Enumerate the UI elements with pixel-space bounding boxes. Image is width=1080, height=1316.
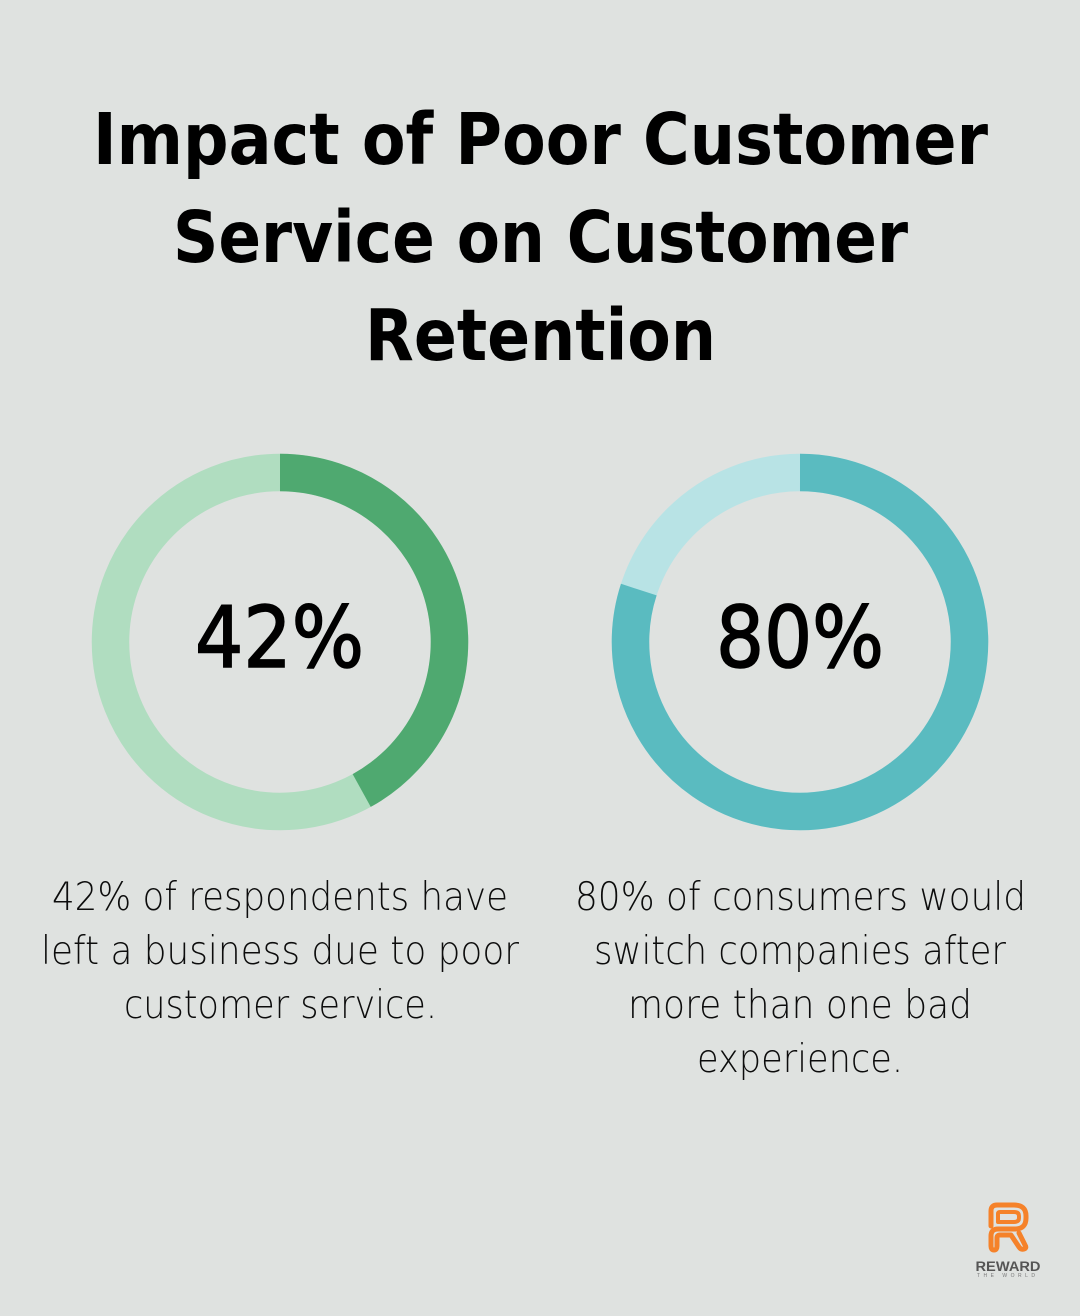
value: 80%: 80% xyxy=(716,589,884,688)
donut chart: 42% xyxy=(110,472,450,812)
title: Service on Customer xyxy=(173,196,908,279)
description: 80%: 80% of consumers would xyxy=(575,874,1026,920)
title: Impact of Poor Customer xyxy=(93,98,988,181)
logo: Reward the World xyxy=(976,1205,1041,1279)
description: 42%: customer service. xyxy=(124,982,437,1028)
wordmark: REWARD xyxy=(976,1259,1041,1274)
description: 80% xyxy=(575,874,1026,1082)
tagline: THE WORLD xyxy=(977,1273,1035,1279)
description: 42%: left a business due to poor xyxy=(41,928,520,974)
panel: 80% stat xyxy=(575,472,1026,1082)
title: Retention xyxy=(365,294,716,377)
description: 42%: 42% of respondents have xyxy=(52,874,508,920)
icon: R mark xyxy=(991,1205,1026,1250)
donut chart: 80% xyxy=(630,472,970,812)
description: 80%: experience. xyxy=(697,1036,903,1082)
description: 42% xyxy=(41,874,520,1028)
value: 42%: 42% xyxy=(195,589,364,688)
panel: 42% stat xyxy=(41,472,520,1028)
description: 80%: switch companies after xyxy=(594,928,1007,974)
description: 80%: more than one bad xyxy=(628,982,972,1028)
title xyxy=(93,98,988,377)
